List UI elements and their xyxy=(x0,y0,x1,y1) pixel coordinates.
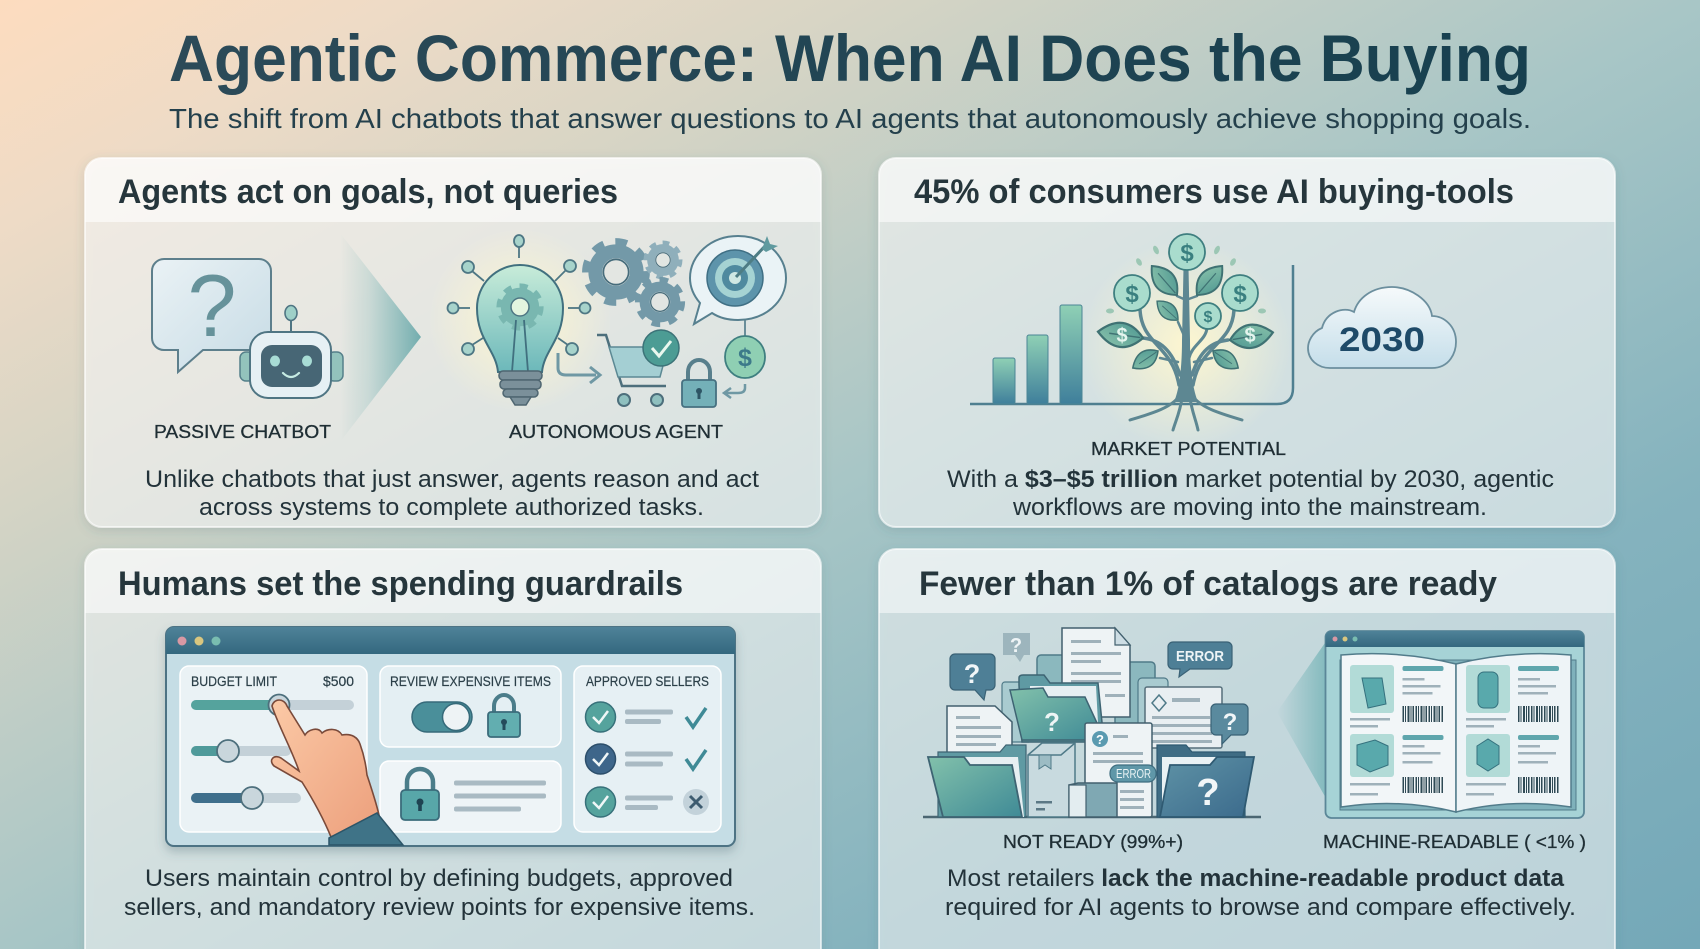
icon: autonomous agent xyxy=(428,228,786,412)
label: market potential: MARKET POTENTIAL xyxy=(1091,439,1286,459)
icon: money tree: $ xyxy=(1233,281,1247,308)
icon: 2030 cloud xyxy=(1308,287,1456,368)
document right xyxy=(1145,687,1222,748)
bubble: error xyxy=(1168,642,1232,677)
body text: Unlike chatbots that just answer, agents reason and act xyxy=(145,466,759,493)
body text: workflows are moving into the mainstream. xyxy=(1012,494,1487,521)
front document: ? xyxy=(1096,732,1104,747)
icon: dollar coin xyxy=(725,336,765,378)
bubble: question left xyxy=(950,654,995,700)
body text xyxy=(145,466,759,521)
bubble: question right xyxy=(1211,704,1248,744)
heading: Agents act on goals, not queries xyxy=(118,173,618,211)
lock panel xyxy=(380,761,561,832)
panel: market potential xyxy=(879,158,1615,527)
body text: Users maintain control by defining budgets, approved xyxy=(145,865,733,892)
budget sliders: BUDGET LIMIT xyxy=(191,674,277,689)
icon: shopping cart xyxy=(597,330,679,406)
label: passive chatbot: PASSIVE CHATBOT xyxy=(154,422,331,442)
body text xyxy=(124,865,755,921)
label: machine-readable: MACHINE-READABLE ( <1% ) xyxy=(1323,832,1586,852)
box xyxy=(1028,743,1075,817)
folder left xyxy=(928,745,1026,817)
approved sellers list xyxy=(574,666,721,832)
dashboard window xyxy=(166,627,735,846)
body text xyxy=(947,466,1554,521)
icon: pointing hand xyxy=(272,700,403,845)
budget sliders: $500 xyxy=(323,674,354,689)
title: Agentic Commerce: When AI Does the Buying xyxy=(169,21,1531,95)
budget sliders xyxy=(180,666,367,832)
panel: agents act on goals xyxy=(85,158,821,527)
icon: flow arrow xyxy=(558,353,600,383)
bubble: question left: ? xyxy=(964,659,980,689)
heading: Humans set the spending guardrails xyxy=(118,565,683,603)
front document xyxy=(1085,723,1152,817)
document left xyxy=(947,706,1012,760)
illustration: machine-readable catalog xyxy=(1326,631,1584,818)
label: autonomous agent: AUTONOMOUS AGENT xyxy=(509,422,723,442)
body text: across systems to complete authorized tasks. xyxy=(199,494,704,521)
bubble: error: ERROR xyxy=(1176,648,1224,665)
bar chart with axis xyxy=(970,240,1293,450)
folder right xyxy=(1157,745,1254,817)
icon: money tree: $ xyxy=(1244,325,1256,347)
icon: target xyxy=(690,236,786,324)
bubble: question grey xyxy=(1003,633,1030,662)
folder right: ? xyxy=(1196,772,1220,814)
back folder xyxy=(1010,675,1104,742)
icon: money tree: $ xyxy=(1125,281,1139,308)
bubble: question right: ? xyxy=(1223,709,1237,736)
arrow: beam to catalog xyxy=(1277,640,1327,800)
open book xyxy=(1340,654,1576,812)
icon: money tree: $ xyxy=(1180,240,1194,267)
panel: spending guardrails xyxy=(85,549,821,949)
icon: dollar coin: $ xyxy=(738,344,752,372)
review expensive items toggle xyxy=(380,666,561,747)
heading: 45% of consumers use AI buying-tools xyxy=(914,173,1514,211)
icon: money tree: $ xyxy=(1116,325,1128,347)
small box xyxy=(1069,783,1117,817)
icon: passive chatbot: ? xyxy=(188,256,236,355)
icon: money tree xyxy=(1096,234,1275,430)
error pill: ERROR xyxy=(1116,767,1151,781)
icon: 2030 cloud: 2030 xyxy=(1339,321,1425,359)
back folder: ? xyxy=(1044,707,1060,737)
icon: money tree: $ xyxy=(1204,309,1213,326)
illustration: messy documents xyxy=(923,628,1261,817)
icon: padlock xyxy=(682,360,716,407)
arrow: chatbot to agent xyxy=(340,233,421,442)
icon: passive chatbot xyxy=(152,256,343,398)
bubble: question grey: ? xyxy=(1010,635,1022,657)
tall document xyxy=(1062,628,1130,717)
body text: sellers, and mandatory review points for expensive items. xyxy=(124,894,755,921)
body text: Most retailers lack the machine-readable product data xyxy=(947,865,1565,892)
subtitle: The shift from AI chatbots that answer questions to AI agents that autonomously achieve shopping goals. xyxy=(169,103,1531,134)
body text: With a $3–$5 trillion market potential by 2030, agentic xyxy=(947,466,1554,493)
body text xyxy=(945,865,1576,921)
error pill xyxy=(1110,765,1156,782)
label: not ready: NOT READY (99%+) xyxy=(1003,832,1183,852)
approved sellers list: APPROVED SELLERS xyxy=(586,674,709,689)
review expensive items toggle: REVIEW EXPENSIVE ITEMS xyxy=(390,674,551,689)
panel: catalog readiness xyxy=(879,549,1615,949)
heading: Fewer than 1% of catalogs are ready xyxy=(919,565,1497,603)
body text: required for AI agents to browse and compare effectively. xyxy=(945,894,1576,921)
